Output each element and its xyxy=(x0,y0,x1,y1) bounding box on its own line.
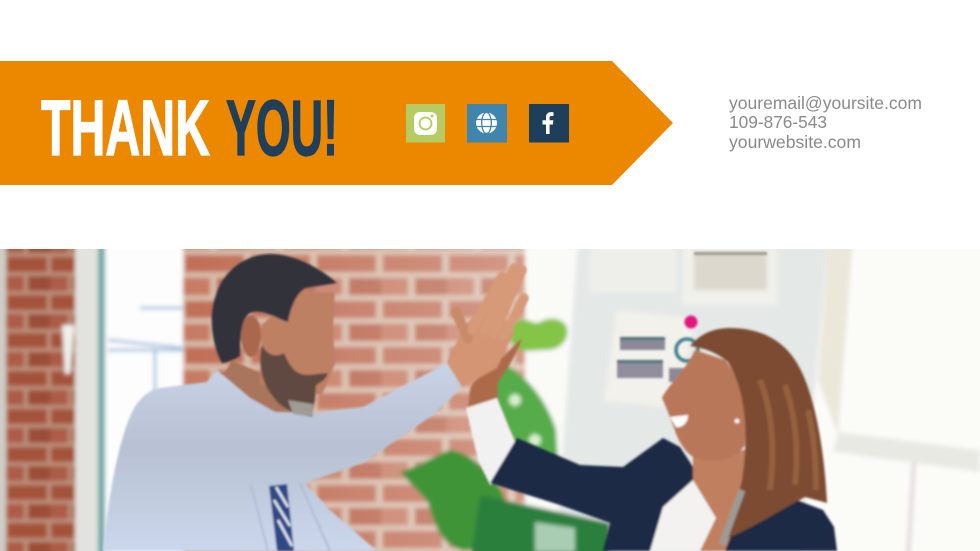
title: THANK xyxy=(41,83,210,172)
woman: neck xyxy=(693,450,745,551)
man: neck xyxy=(222,360,300,420)
man: face xyxy=(260,292,335,395)
window frame at right xyxy=(818,240,980,551)
woman: hair xyxy=(690,328,827,540)
woman xyxy=(466,328,837,551)
photo: man and woman high-five in an office xyxy=(0,249,980,551)
woman: white sleeve xyxy=(466,398,518,485)
man: tie xyxy=(269,484,294,551)
icon: facebook xyxy=(529,104,569,142)
website: yourwebsite.com xyxy=(729,132,861,152)
woman: laugh xyxy=(670,415,688,427)
man: hair xyxy=(212,254,337,363)
icon: instagram xyxy=(406,104,445,142)
man: ear xyxy=(241,315,261,357)
banner: orange arrow with title and icons xyxy=(0,61,673,185)
man: shirt placket xyxy=(251,483,330,551)
office background xyxy=(0,240,980,551)
woman: face xyxy=(662,350,746,461)
arrow banner shape xyxy=(0,61,673,185)
phone: 109-876-543 xyxy=(729,112,827,132)
chart details on whiteboard xyxy=(617,252,767,382)
man xyxy=(103,254,462,551)
woman's hand xyxy=(468,338,522,410)
plant xyxy=(400,319,610,551)
man: beard xyxy=(260,345,328,417)
man: shirt and raised arm xyxy=(103,363,462,551)
title: YOU! xyxy=(226,83,338,172)
woman: shirt xyxy=(650,480,716,551)
email: youremail@yoursite.com xyxy=(729,93,922,113)
woman: earring xyxy=(734,418,740,424)
contact details xyxy=(729,93,922,152)
woman: navy blazer xyxy=(490,438,837,551)
man's hand xyxy=(447,268,524,387)
icon: globe xyxy=(467,104,507,142)
whiteboard with charts xyxy=(555,240,828,551)
